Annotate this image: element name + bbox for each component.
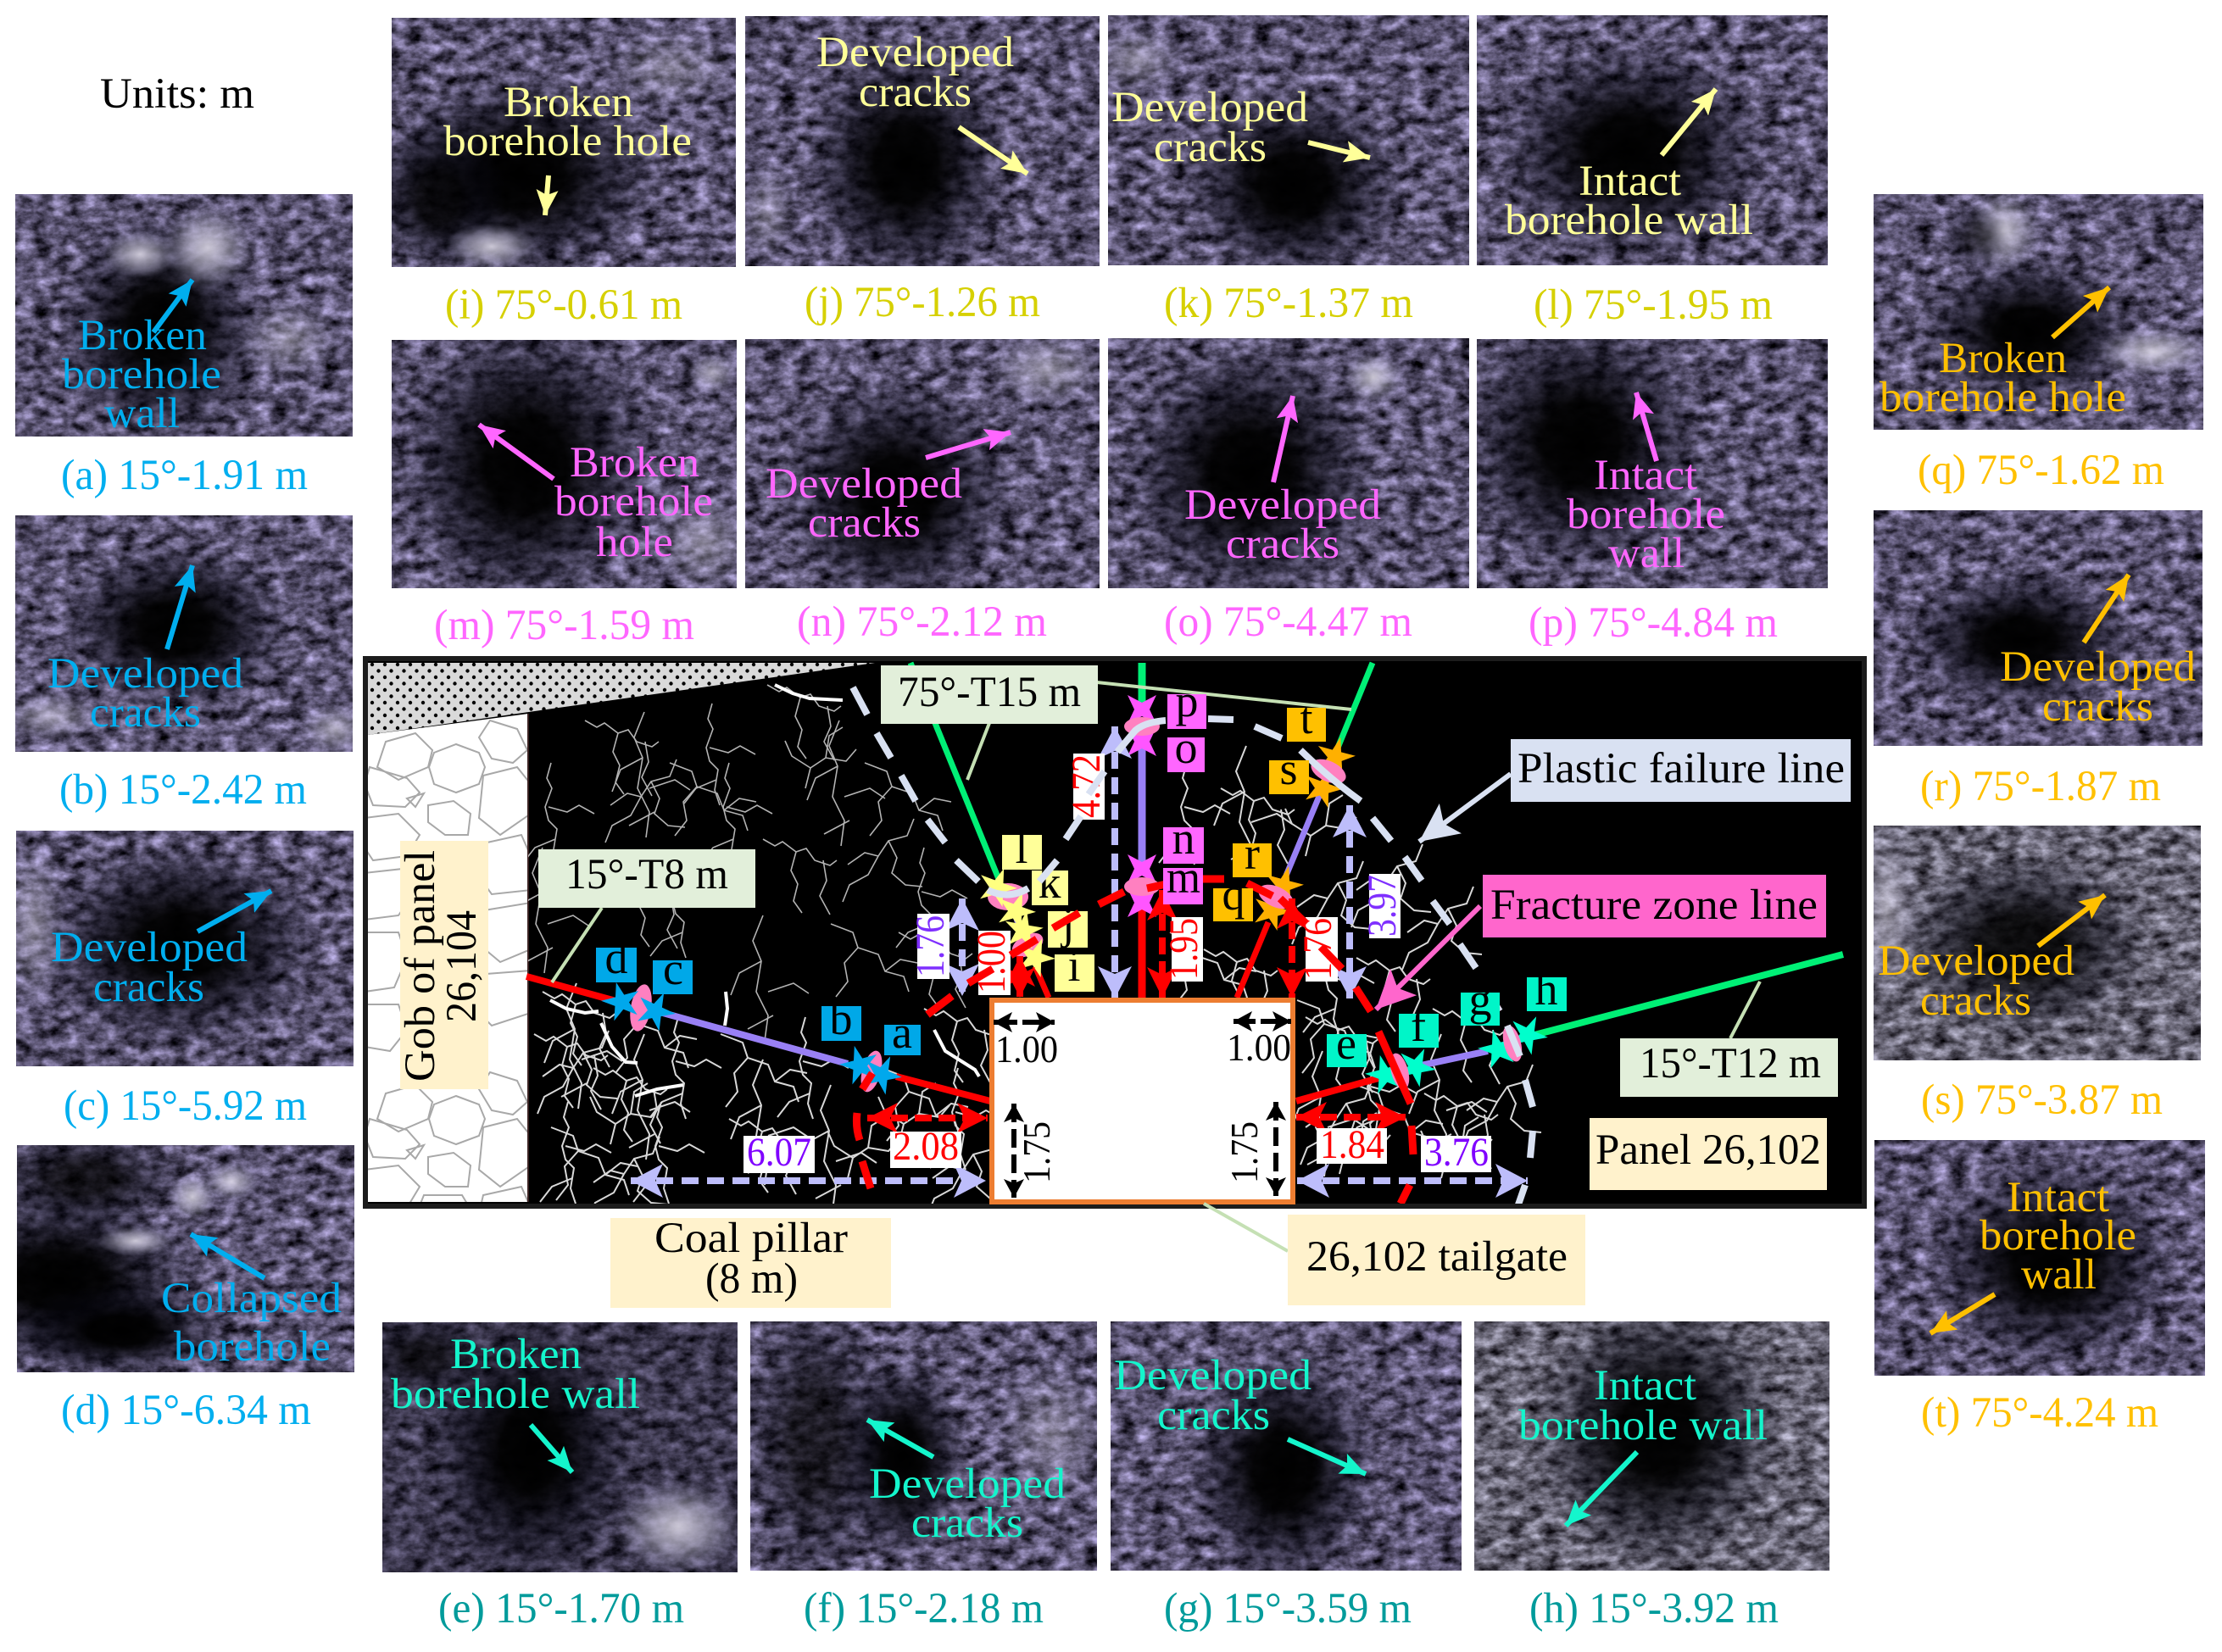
yellow stars and ellipses [973,862,1061,980]
tag r [1233,828,1272,879]
lavender measurement arrows [631,726,1528,1181]
tag f: f [1411,1000,1426,1051]
photo panel r: (r) 75°-1.87 m [1920,763,2161,810]
photo panel f: cracks [911,1499,1023,1547]
photo panel q [1874,188,2213,494]
photo panel e [356,1314,742,1633]
photo panel n: Developed [766,460,962,508]
fracture zone dashed line [856,879,1413,1204]
photo panel p: Intact [1594,452,1697,499]
photo panel n: (n) 75°-2.12 m [797,598,1047,646]
magenta stars and ellipses [1124,695,1160,917]
tag e: e [1336,1018,1356,1069]
photo panel o [1108,337,1469,646]
photo panel l: (l) 75°-1.95 m [1534,281,1773,329]
central diagram panel [363,656,1867,1209]
photo panel j [738,16,1100,326]
tag p: p [1175,676,1199,726]
photo panel t: (t) 75°-4.24 m [1921,1389,2158,1437]
tag g: g [1468,974,1492,1025]
tag d: d [605,932,627,983]
height arrow left [1011,1104,1016,1198]
label 1.76 right: 1.76 [1295,918,1340,980]
tailgate leader line [1204,1204,1288,1251]
photo panel j: cracks [859,69,972,116]
roof dotted band [368,663,875,735]
photo panel o: Developed [1184,481,1381,529]
tag s: s [1279,743,1298,794]
photo panel k [1089,15,1469,327]
label 3.76: 3.76 [1424,1130,1489,1175]
panel label: Panel 26,102 [1595,1126,1821,1174]
photo panel f [738,1280,1111,1633]
panel label [1590,1118,1827,1190]
photo panel h: (h) 15°-3.92 m [1529,1585,1779,1633]
label 2.08: 2.08 [893,1124,959,1169]
photo panel b [0,515,369,814]
photo panel l [1477,15,1828,329]
photo panel s [1852,814,2201,1124]
photo panel g [1111,1321,1462,1633]
photo panel h: Intact [1594,1362,1696,1410]
label 3.97: 3.97 [1360,875,1405,937]
photo panel h: borehole wall [1518,1402,1768,1449]
photo panel p: borehole [1567,491,1725,538]
gob label: 26,104 [438,910,486,1022]
photo panel p: wall [1608,530,1685,577]
photo panel c [0,831,354,1130]
tag l: l [1015,822,1028,873]
gold stars and ellipses [1248,732,1359,933]
photo panel d: Collapsed [161,1275,342,1322]
photo panel o: (o) 75°-4.47 m [1164,598,1412,646]
width arrow left [994,1020,1055,1025]
photo panel m [390,312,755,649]
borehole tag 75 deg T15: 75°-T15 m [898,669,1081,716]
photo panel e: borehole wall [391,1371,640,1418]
photo panel j: (j) 75°-1.26 m [805,279,1040,326]
tag r: r [1245,828,1260,879]
photo panel p: (p) 75°-4.84 m [1529,599,1778,647]
photo panel o: cracks [1226,520,1339,568]
tag b [821,993,861,1044]
tag i: i [1067,940,1081,991]
photo panel c: cracks [93,964,204,1011]
photo panel a: (a) 15°-1.91 m [61,452,308,499]
photo panel b: Developed [47,650,243,698]
tag a [884,1007,921,1058]
borehole vertical [1138,663,1146,998]
label 1.95: 1.95 [1161,918,1206,980]
fracture zone label [1483,875,1826,937]
tag o [1167,722,1205,773]
tag t [1287,693,1326,743]
borehole 75 degrees left T15 [911,663,1049,998]
tag e [1327,1018,1367,1069]
photo panel m: Broken [570,439,699,487]
tag k: k [1038,857,1061,908]
width arrow right [1234,1019,1291,1024]
coal pillar label [610,1215,891,1308]
photo panel c: Developed [51,924,248,971]
photo panel q: borehole hole [1880,374,2126,421]
label 6.07: 6.07 [747,1130,811,1175]
coal pillar label: Coal pillar [654,1215,848,1262]
tag j [1048,898,1088,948]
tag j: j [1060,898,1075,948]
tailgate label: 26,102 tailgate [1306,1233,1568,1281]
tag c [653,943,693,994]
photo panel e: Broken [450,1331,582,1378]
photo panel i: borehole hole [443,118,692,165]
photo panel f: (f) 15°-2.18 m [804,1585,1044,1633]
borehole tag 15 deg T8: 15°-T8 m [565,851,728,898]
tag t: t [1300,693,1313,743]
photo panel d [0,1127,354,1434]
borehole tag 15 deg T12: 15°-T12 m [1640,1040,1821,1087]
photo panel l: Intact [1579,158,1681,205]
label 1.00 vertical: 1.00 [969,931,1014,993]
photo panel i [370,18,738,329]
photo panel i: Broken [504,79,633,126]
tag h [1527,964,1567,1015]
label 1.84: 1.84 [1320,1122,1384,1167]
photo panel j: Developed [816,29,1014,76]
width text left: 1.00 [995,1027,1058,1071]
leader lines [552,682,1760,1038]
photo panel n [745,331,1106,646]
photo panel r: Developed [2000,643,2196,691]
tag m: m [1167,852,1200,903]
width text right: 1.00 [1227,1026,1291,1069]
photo panel m: hole [596,519,673,566]
photo panel n: cracks [808,499,921,547]
photo panel e: (e) 15°-1.70 m [438,1585,684,1633]
fracture zone arrow [1376,906,1480,1010]
photo panel g: (g) 15°-3.59 m [1164,1585,1412,1633]
photo panel i: (i) 75°-0.61 m [445,281,682,329]
height text left: 1.75 [1015,1121,1058,1183]
crack network [510,685,1541,1220]
height text right: 1.75 [1222,1121,1266,1183]
photo panel g: Developed [1114,1352,1311,1399]
photo panel m: (m) 75°-1.59 m [434,602,694,649]
label 1.76 left: 1.76 [908,915,953,977]
photo panel l: borehole wall [1505,197,1753,244]
photo panel b: cracks [90,689,201,737]
photo panel p [1454,308,1828,647]
photo panel t: Intact [2007,1174,2109,1221]
tag f [1399,1000,1439,1051]
tag a: a [892,1007,912,1058]
photo panel r: cracks [2042,683,2153,731]
tag n: n [1172,813,1195,864]
aqua stars and ellipses [1362,1009,1554,1096]
coal pillar label: (8 m) [705,1255,798,1303]
photo panel k: cracks [1154,124,1267,171]
plastic failure label: Plastic failure line [1518,745,1845,793]
borehole tag 15 deg T8 [538,849,755,908]
borehole 15 degrees left T8 [526,976,990,1101]
tag q [1213,869,1253,921]
plastic failure arrow [1419,774,1511,842]
tag p [1167,676,1206,729]
photo panel t: borehole [1980,1212,2136,1260]
tag k [1032,857,1068,908]
tag g [1461,974,1500,1026]
tag q: q [1222,869,1245,920]
photo panel q: Broken [1939,335,2067,382]
borehole 75 degrees right [1237,663,1373,998]
photo panel f: Developed [869,1460,1066,1508]
photo panel h [1474,1293,1829,1633]
photo panel a: wall [104,390,180,437]
tag b: b [829,993,853,1044]
photo panel s: (s) 75°-3.87 m [1921,1076,2163,1124]
photo panel a: borehole [62,351,221,398]
height arrow right [1273,1102,1278,1196]
gob label: Gob of panel [397,850,444,1082]
label 4.72: 4.72 [1064,754,1109,818]
photo panel k: Developed [1111,84,1308,131]
tag o: o [1175,722,1197,773]
photo panel a: Broken [78,312,207,359]
red measurement arrows [867,890,1406,1118]
photo panel c: (c) 15°-5.92 m [64,1082,307,1130]
tag l [1002,822,1042,873]
photo panel a [15,194,353,499]
photo panel d: borehole [174,1323,331,1371]
tag d [596,932,637,983]
units note: Units: m [100,70,254,118]
tag c: c [663,943,683,994]
photo panel m: borehole [554,478,713,526]
photo panel s: Developed [1878,937,2074,985]
tag s [1269,743,1309,794]
photo panel t: wall [2021,1251,2097,1299]
photo panel g: cracks [1157,1392,1270,1439]
fracture zone label: Fracture zone line [1490,882,1818,929]
photo panel t [1874,1140,2205,1437]
plastic failure dashed line [853,687,1533,1207]
tailgate roadway [992,1000,1293,1202]
blue stars and ellipses [598,977,908,1098]
tailgate label [1288,1215,1585,1305]
tag n [1163,813,1204,864]
gob label [397,841,488,1089]
gob area with stones [368,714,529,1202]
tag h: h [1534,964,1558,1015]
photo panel d: (d) 15°-6.34 m [61,1387,311,1434]
photo panel b: (b) 15°-2.42 m [59,766,307,814]
tag i [1055,940,1094,992]
photo panel s: cracks [1920,977,2031,1025]
photo panel r [1874,510,2203,810]
photo panel q: (q) 75°-1.62 m [1918,447,2164,494]
borehole 15 degrees right T12 [1296,954,1843,1101]
photo panel k: (k) 75°-1.37 m [1164,280,1413,327]
